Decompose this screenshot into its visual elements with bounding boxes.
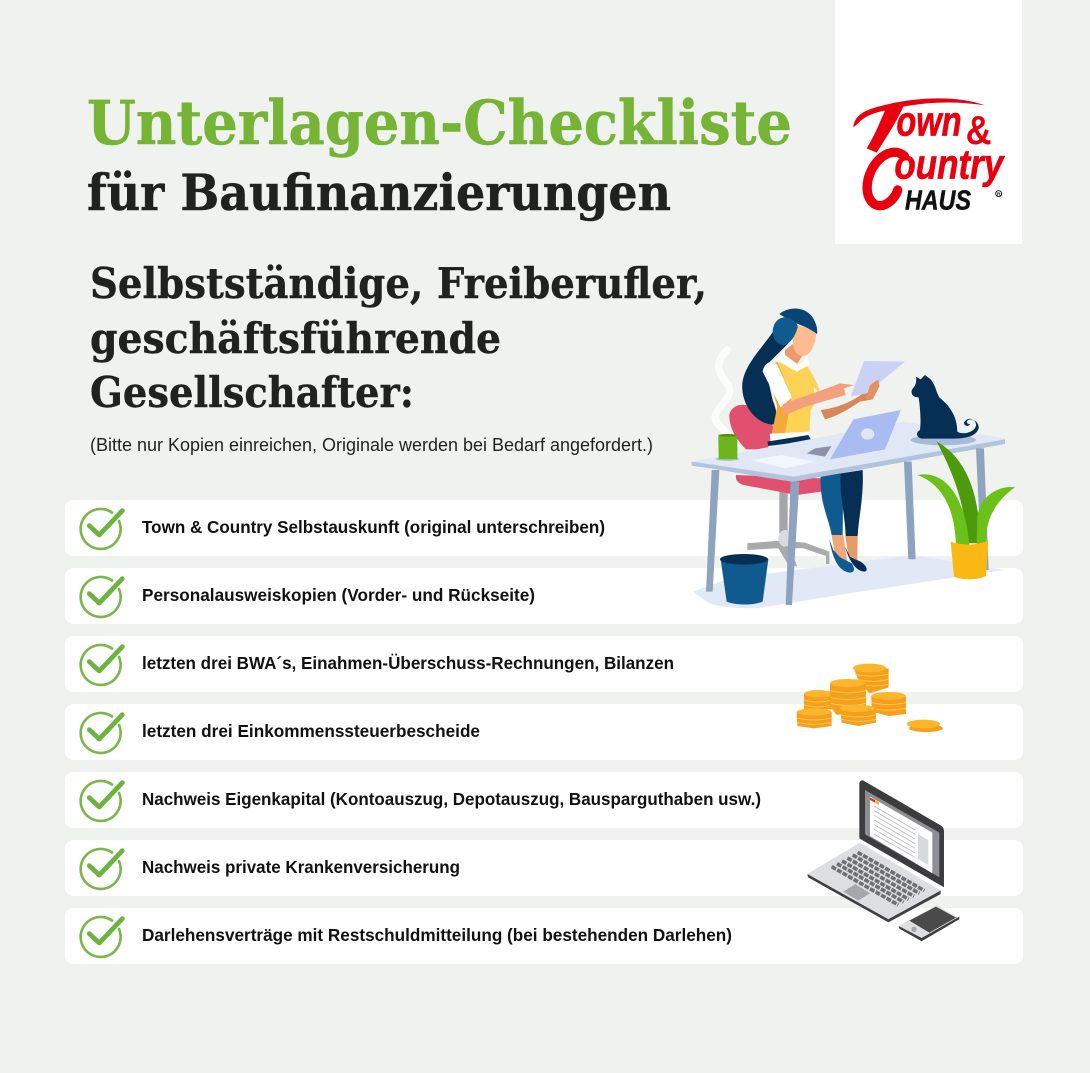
chair back bbox=[729, 405, 775, 449]
hand over paper bbox=[866, 379, 879, 399]
back right stack bbox=[853, 664, 889, 693]
steam bbox=[715, 350, 730, 435]
laptop bbox=[795, 410, 901, 460]
row 4 bbox=[65, 704, 1023, 760]
logo: Town & Country Haus: & bbox=[966, 107, 992, 153]
text lines bbox=[874, 806, 915, 857]
logo panel bbox=[835, 0, 1022, 244]
logo: Town & Country Haus bbox=[853, 98, 1005, 216]
row 3: letzten drei BWA´s, Einahmen-Überschuss-Rechnungen, Bilanzen bbox=[142, 653, 674, 673]
sleeve bbox=[763, 362, 792, 407]
row 6: Nachweis private Krankenversicherung bbox=[142, 857, 460, 877]
icon: laptop and phone bbox=[807, 780, 959, 941]
floor shadow bbox=[693, 555, 1003, 608]
subheading: geschäftsführende bbox=[90, 314, 501, 363]
row 5: Nachweis Eigenkapital (Kontoauszug, Depotauszug, Bausparguthaben usw.) bbox=[142, 789, 761, 809]
laptop base bbox=[807, 843, 941, 922]
note: (Bitte nur Kopien einreichen, Originale werden bei Bedarf angefordert.) bbox=[90, 435, 653, 455]
row 6 bbox=[65, 840, 1023, 896]
trackpad bbox=[843, 884, 870, 901]
row 7 bbox=[65, 908, 1023, 964]
collar bbox=[775, 353, 809, 372]
title line 2: für Baufinanzierungen bbox=[87, 163, 671, 222]
white hem bbox=[770, 432, 809, 440]
title line 1: Unterlagen-Checkliste bbox=[87, 88, 792, 159]
cat bbox=[911, 375, 979, 445]
table top bbox=[692, 422, 1005, 482]
cup bbox=[715, 457, 739, 461]
chair stand bbox=[747, 490, 829, 567]
paper bbox=[851, 361, 905, 397]
near arm bbox=[783, 383, 854, 414]
row 3 bbox=[65, 636, 1023, 692]
bin bbox=[720, 554, 768, 605]
row 2 bbox=[65, 568, 1023, 624]
neck and face bbox=[785, 340, 803, 364]
logo: Town & Country Haus: own bbox=[896, 98, 962, 145]
logo: Town & Country Haus: R bbox=[997, 192, 1001, 198]
left stack bbox=[804, 690, 832, 709]
checklist bbox=[65, 500, 1023, 964]
row 7: Darlehensverträge mit Restschuldmitteilung (bei bestehenden Darlehen) bbox=[142, 925, 732, 945]
logo: Town & Country Haus: ountry bbox=[894, 140, 1005, 187]
sidebar bbox=[918, 834, 928, 865]
row 4: letzten drei Einkommenssteuerbescheide bbox=[142, 721, 480, 741]
headphone / hair side bbox=[773, 317, 798, 345]
feet and shoes bbox=[832, 535, 847, 562]
legs bbox=[821, 473, 843, 535]
keyboard bbox=[832, 852, 924, 905]
illustration: woman at desk bbox=[692, 308, 1015, 608]
front center stack bbox=[840, 705, 876, 726]
icon: coins bbox=[797, 664, 943, 732]
row 5 bbox=[65, 772, 1023, 828]
subheading bbox=[90, 259, 707, 417]
display bbox=[865, 790, 939, 877]
browser dots bbox=[870, 797, 875, 803]
table legs bbox=[706, 470, 719, 592]
plant bbox=[917, 442, 1015, 579]
single coins bbox=[907, 720, 943, 732]
row 1 bbox=[65, 500, 1023, 556]
hair back bbox=[742, 318, 788, 425]
far arm bbox=[821, 379, 879, 419]
screen bezel bbox=[859, 780, 944, 887]
hair top bbox=[779, 308, 817, 334]
subheading: Selbstständige, Freiberufler, bbox=[90, 259, 707, 308]
right stack bbox=[871, 692, 906, 716]
phone bbox=[899, 905, 959, 941]
torso: vest bbox=[767, 359, 821, 437]
paper on table bbox=[752, 455, 815, 468]
subheading: Gesellschafter: bbox=[90, 368, 414, 417]
front left stack bbox=[797, 708, 832, 728]
logo: Town & Country Haus: HAUS bbox=[905, 185, 971, 216]
center stack bbox=[830, 679, 866, 715]
chair seat bbox=[736, 475, 822, 495]
row 1: Town & Country Selbstauskunft (original unterschreiben) bbox=[142, 517, 605, 537]
title bbox=[87, 88, 792, 222]
row 2: Personalausweiskopien (Vorder- und Rückseite) bbox=[142, 585, 535, 605]
